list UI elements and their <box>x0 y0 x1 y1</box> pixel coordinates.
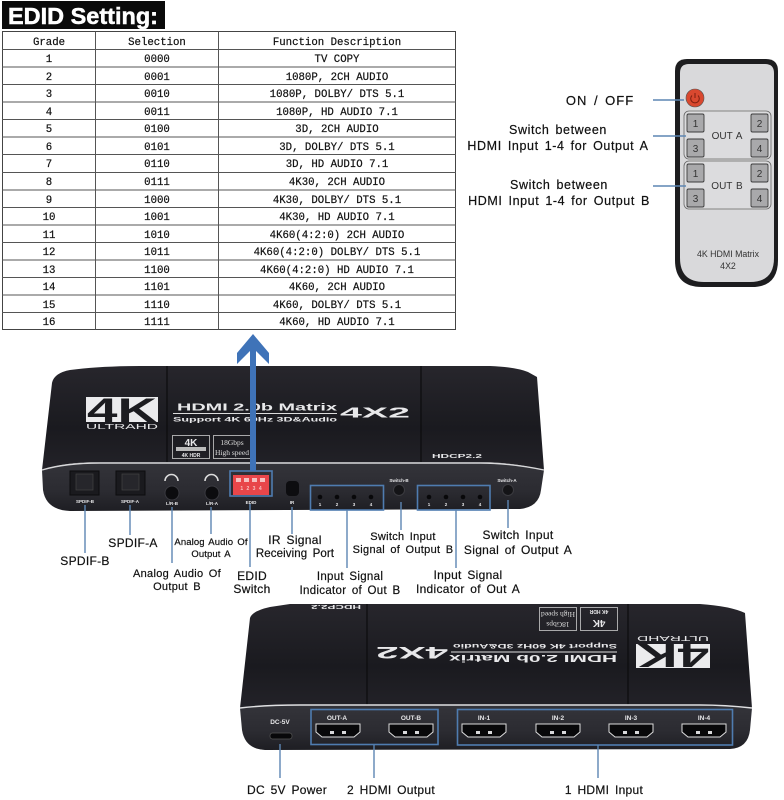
indicators: out B: 1 <box>319 502 322 507</box>
row 1 <box>46 54 360 66</box>
product name rotated: Support 4K 60Hz 3D&Audio <box>452 642 617 648</box>
badge: 18Gbps rotated: 18Gbps <box>546 620 570 629</box>
product name: Support 4K 60Hz 3D&Audio <box>173 418 338 424</box>
button group: OUT A: 3 <box>693 144 699 155</box>
label: SPDIF-A: SPDIF-A <box>108 536 158 550</box>
4K UltraHD logo: 4K <box>87 392 158 430</box>
row 14 <box>43 282 385 294</box>
row 9: 9 <box>46 195 52 207</box>
port: audio L/R-A <box>205 474 219 506</box>
rear front panel <box>240 705 752 750</box>
row 9: 1000 <box>144 195 170 207</box>
label: EDID switch <box>233 569 271 596</box>
row 4: 0011 <box>144 107 170 119</box>
row 16: 16 <box>43 317 55 329</box>
port: DC 5V micro USB: DC-5V <box>270 719 290 726</box>
product name: 4X2 <box>340 404 410 422</box>
row 11: 11 <box>43 230 55 242</box>
badge: 18Gbps rotated <box>540 608 576 630</box>
4K logo rotated <box>636 634 710 674</box>
HDMI input group: IN-2 <box>552 715 565 722</box>
label: IR signal: IR Signal <box>268 533 322 547</box>
label: switch output A <box>464 528 572 557</box>
row 5: 5 <box>46 124 52 136</box>
button group: OUT A: OUT A <box>712 131 743 142</box>
row 4 <box>46 107 398 119</box>
row 8: 0111 <box>144 177 170 189</box>
icon: power button <box>686 89 704 107</box>
remote model text: 4X2 <box>720 261 736 271</box>
HDMI input group <box>458 710 732 745</box>
row 11: 4K60(4:2:0) 2CH AUDIO <box>270 230 404 242</box>
product name rotated: HDMI 2.0b Matrix <box>448 652 617 663</box>
label: switch output B: Switch Input <box>370 531 436 543</box>
label: output B switching: Switch between <box>510 178 608 192</box>
label: switch output B <box>353 531 453 556</box>
row 13: 13 <box>43 265 55 277</box>
table header <box>33 37 401 49</box>
badge: 4K HDR: 4K <box>185 438 198 449</box>
label: DC 5V power: DC 5V Power <box>247 783 327 797</box>
remote model text <box>697 249 760 271</box>
row 2 <box>46 72 388 84</box>
badge: 18Gbps: High speed <box>215 448 249 457</box>
table header: Selection <box>128 37 186 49</box>
port: SPDIF-A: SPDIF-A <box>121 499 140 504</box>
button group: OUT B: 4 <box>757 194 763 205</box>
badge: 4K HDR: 4K HDR <box>182 453 201 459</box>
port: SPDIF-B: SPDIF-B <box>76 499 95 504</box>
arrow: EDID switch to table <box>237 334 269 471</box>
button group: OUT B: 2 <box>757 169 763 180</box>
indicators: out A: 3 <box>462 502 465 507</box>
row 8 <box>46 177 385 189</box>
badge: 4K HDR rotated: 4K HDR <box>589 608 608 614</box>
label: EDID switch: EDID <box>237 569 267 583</box>
button group: OUT B: 1 <box>693 169 699 180</box>
row 12: 4K60(4:2:0) DOLBY/ DTS 5.1 <box>254 247 420 259</box>
row 1: 1 <box>46 54 52 66</box>
label: HDMI output: 2 HDMI Output <box>347 783 435 797</box>
label: indicator out A <box>416 568 520 596</box>
badge: 4K HDR rotated <box>580 608 618 630</box>
indicators: out A: 1 <box>428 502 431 507</box>
label: indicator out A: Indicator of Out A <box>416 582 520 596</box>
row 10: 1001 <box>144 212 170 224</box>
badge: 18Gbps <box>214 436 250 458</box>
port: DC 5V micro USB <box>270 719 292 739</box>
device front panel <box>42 462 544 511</box>
label: HDMI input: 1 HDMI Input <box>565 783 644 797</box>
button: Switch-B: Switch-B <box>389 478 409 483</box>
row 8: 4K30, 2CH AUDIO <box>289 177 385 189</box>
row 3: 0010 <box>144 89 170 101</box>
button group: OUT A <box>684 111 771 159</box>
port: audio L/R-B <box>165 474 179 506</box>
label: output A switching: HDMI Input 1-4 for Output A <box>467 139 649 153</box>
button: Switch-A <box>497 478 517 496</box>
port: audio L/R-B: L/R-B <box>166 501 179 506</box>
row 12: 12 <box>43 247 55 259</box>
row 1: TV COPY <box>315 54 360 66</box>
label: indicator out B: Input Signal <box>317 571 383 583</box>
row 13: 1100 <box>144 265 170 277</box>
4K UltraHD logo: ULTRAHD <box>86 424 158 431</box>
label: output A switching: Switch between <box>509 123 607 137</box>
indicators: out A: 2 <box>445 502 448 507</box>
row 2: 2 <box>46 72 52 84</box>
row 1: 0000 <box>144 54 170 66</box>
badge: 4K HDR rotated: 4K <box>592 617 605 628</box>
row 11: 1010 <box>144 230 170 242</box>
label: analog audio output B <box>133 568 222 593</box>
table header: Grade <box>33 37 65 49</box>
row 4: 1080P, HD AUDIO 7.1 <box>276 107 398 119</box>
HDMI input group: IN-4 <box>698 715 711 722</box>
row 6: 6 <box>46 142 52 154</box>
label: indicator out B <box>300 571 400 597</box>
label: output A switching <box>467 123 649 153</box>
label: switch output A: Signal of Output A <box>464 543 572 557</box>
badge: 4K HDR <box>172 436 210 459</box>
row 12 <box>43 247 420 259</box>
row 16 <box>43 317 395 329</box>
row 7: 3D, HD AUDIO 7.1 <box>286 159 388 171</box>
rear top surface <box>240 603 752 708</box>
port: IR receiver: IR <box>290 500 295 505</box>
label: switch output A: Switch Input <box>483 528 554 542</box>
button group: OUT A: 4 <box>757 144 763 155</box>
HDMI output group <box>311 710 438 744</box>
row 5: 0100 <box>144 124 170 136</box>
title: EDID Setting: <box>8 3 158 29</box>
row 8: 8 <box>46 177 52 189</box>
indicators: out B: 3 <box>353 502 356 507</box>
row 5 <box>46 124 379 136</box>
HDCP label: HDCP2.2 <box>432 454 482 460</box>
EDID DIP switch: EDID <box>246 500 257 505</box>
HDCP label rotated: HDCP2.2 <box>311 603 361 609</box>
remote model text: 4K HDMI Matrix <box>697 249 760 259</box>
row 16: 4K60, HD AUDIO 7.1 <box>279 317 395 329</box>
row 9: 4K30, DOLBY/ DTS 5.1 <box>273 195 401 207</box>
row 10 <box>43 212 395 224</box>
HDMI input group: IN-1 <box>478 715 491 722</box>
label: IR signal: Receiving Port <box>256 548 335 560</box>
row 5: 3D, 2CH AUDIO <box>295 124 379 136</box>
HDMI output group: OUT-B <box>401 715 421 722</box>
HDMI input group: IN-3 <box>625 715 638 722</box>
device: rear panel view <box>240 603 752 750</box>
row 6: 0101 <box>144 142 170 154</box>
button group: OUT A: 2 <box>757 119 763 130</box>
product name rotated <box>448 642 617 663</box>
row 11 <box>43 230 404 242</box>
button group: OUT B: OUT B <box>711 181 743 192</box>
label: indicator out A: Input Signal <box>434 568 502 582</box>
row 2: 1080P, 2CH AUDIO <box>286 72 388 84</box>
row 7: 7 <box>46 159 52 171</box>
button: Switch-B <box>389 478 409 496</box>
label: EDID switch: Switch <box>233 582 271 596</box>
table header: Function Description <box>273 37 401 49</box>
HDMI output group: OUT-A <box>327 715 347 722</box>
rear panel callout lines <box>280 744 598 778</box>
device top surface <box>42 366 544 470</box>
row 7 <box>46 159 388 171</box>
label: switch output B: Signal of Output B <box>353 544 453 556</box>
row 13 <box>43 265 414 277</box>
remote control <box>675 59 778 287</box>
4K logo rotated: 4K <box>637 637 709 674</box>
row 15 <box>43 300 401 312</box>
front panel callout lines <box>85 500 508 568</box>
indicators: out B <box>310 486 384 510</box>
button: Switch-A: Switch-A <box>497 478 517 483</box>
label: output B switching: HDMI Input 1-4 for Output B <box>468 194 650 208</box>
port: SPDIF-A <box>116 471 145 504</box>
port: SPDIF-B <box>70 471 99 504</box>
row 10: 10 <box>43 212 55 224</box>
row 16: 1111 <box>144 317 170 329</box>
label: analog audio output B: Analog Audio Of <box>133 568 222 580</box>
row 3 <box>46 89 404 101</box>
label: indicator out B: Indicator of Out B <box>300 585 400 597</box>
label: analog audio output A: Output A <box>191 549 231 560</box>
row 15: 15 <box>43 300 55 312</box>
EDID DIP switch: 1 2 3 4 <box>240 486 262 492</box>
row 9 <box>46 195 401 207</box>
row 14: 1101 <box>144 282 170 294</box>
badge: 18Gbps rotated: High speed <box>541 610 575 619</box>
label: analog audio output A: Analog Audio Of <box>174 537 248 548</box>
table: EDID settings <box>2 32 456 330</box>
label: on / off: ON / OFF <box>566 93 634 108</box>
row 15: 1110 <box>144 300 170 312</box>
row 2: 0001 <box>144 72 170 84</box>
row 4: 4 <box>46 107 52 119</box>
device: front panel view <box>42 366 544 511</box>
button group: OUT A: 1 <box>693 119 699 130</box>
indicators: out B: 2 <box>336 502 339 507</box>
row 7: 0110 <box>144 159 170 171</box>
row 12: 1011 <box>144 247 170 259</box>
row 14: 14 <box>43 282 55 294</box>
indicators: out B: 4 <box>370 502 373 507</box>
port: IR receiver <box>286 481 299 505</box>
label: IR signal <box>256 533 335 560</box>
product name: HDMI 2.0b Matrix <box>177 402 338 414</box>
row 6: 3D, DOLBY/ DTS 5.1 <box>279 142 395 154</box>
row 15: 4K60, DOLBY/ DTS 5.1 <box>273 300 401 312</box>
row 3: 1080P, DOLBY/ DTS 5.1 <box>270 89 404 101</box>
remote callout lines <box>653 100 686 186</box>
4K logo rotated: ULTRAHD <box>637 634 709 641</box>
port: audio L/R-A: L/R-A <box>206 501 219 506</box>
row 10: 4K30, HD AUDIO 7.1 <box>279 212 395 224</box>
button group: OUT B: 3 <box>693 194 699 205</box>
indicators: out A: 4 <box>479 502 482 507</box>
row 3: 3 <box>46 89 52 101</box>
row 14: 4K60, 2CH AUDIO <box>289 282 385 294</box>
indicators: out A <box>418 486 490 510</box>
label: output B switching <box>468 178 650 208</box>
EDID DIP switch <box>230 471 272 505</box>
button group: OUT B <box>684 161 771 209</box>
badge: 18Gbps: 18Gbps <box>220 438 244 447</box>
product name <box>173 402 410 424</box>
label: analog audio output B: Output B <box>153 581 201 593</box>
4X2 rotated: 4X2 <box>376 643 448 661</box>
row 13: 4K60(4:2:0) HD AUDIO 7.1 <box>260 265 414 277</box>
label: analog audio output A <box>174 537 248 560</box>
row 6 <box>46 142 395 154</box>
label: SPDIF-B: SPDIF-B <box>60 554 110 568</box>
4K UltraHD logo <box>86 392 158 431</box>
